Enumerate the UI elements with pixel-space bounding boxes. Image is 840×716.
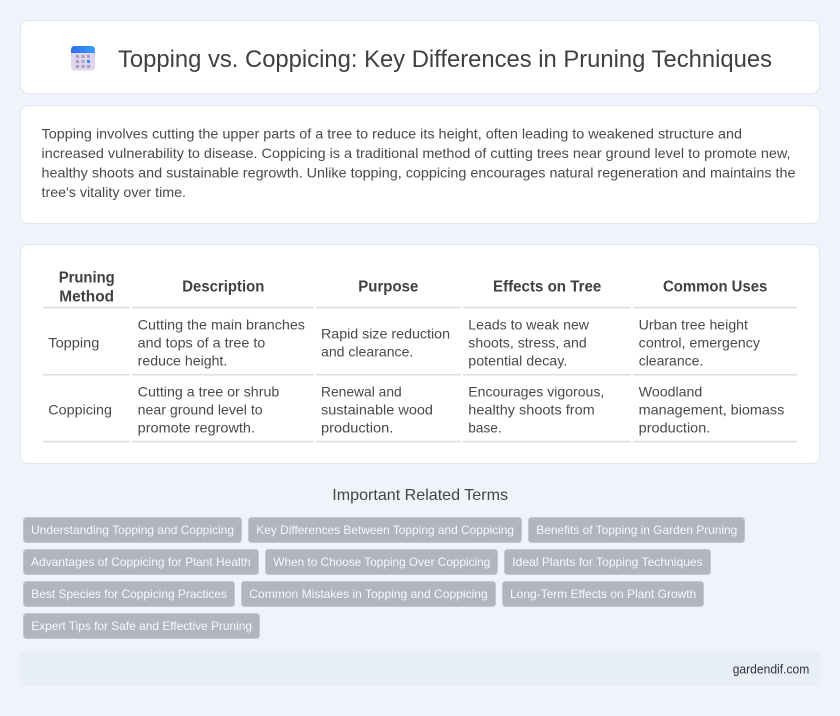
table row: Coppicing: production.: [321, 419, 393, 435]
text block: introduction: healthy shoots and sustainable regrowth. Unlike topping, coppicing encourages natural regeneration and maintains the: [42, 164, 796, 180]
table header row: Effects on Tree: [493, 279, 601, 296]
heading: related terms: Important Related Terms: [332, 487, 508, 504]
tag: [242, 582, 496, 606]
table row: Coppicing: Woodland: [639, 383, 702, 399]
tag: [504, 550, 710, 574]
table row: Topping: shoots, stress, and: [468, 334, 587, 350]
table row: Topping: Leads to weak new: [468, 316, 590, 332]
table row: Coppicing: Encourages vigorous,: [468, 383, 604, 399]
table header row: Pruning: [59, 270, 115, 287]
tag: Understanding Topping and Coppicing: [31, 523, 234, 537]
table row: Topping: Urban tree height: [639, 316, 748, 332]
panel: introduction: [20, 106, 820, 224]
tag: Best Species for Coppicing Practices: [31, 587, 227, 601]
panel: related term tags: [24, 518, 744, 638]
table row: Coppicing: base.: [468, 419, 502, 435]
table row: Coppicing: management, biomass: [639, 401, 784, 417]
table row: Topping: reduce height.: [138, 352, 227, 368]
panel: comparison table: [20, 244, 820, 464]
table header row: Common Uses: [663, 279, 767, 296]
table row: Topping: Topping: [48, 334, 99, 350]
tag: Ideal Plants for Topping Techniques: [512, 555, 703, 569]
text block: introduction: increased vulnerability to disease. Coppicing is a traditional method of cutting trees near ground level to promote new,: [42, 145, 791, 161]
tag: Expert Tips for Safe and Effective Pruning: [31, 619, 252, 633]
footer bar: [20, 652, 820, 686]
table header row: Purpose: [358, 279, 418, 296]
table row: Topping: potential decay.: [468, 352, 567, 368]
table row: Topping: Rapid size reduction: [321, 325, 450, 341]
table header row: Description: [182, 279, 264, 296]
tag: [24, 518, 242, 542]
table row: Coppicing: healthy shoots from: [468, 401, 595, 417]
table row: Topping: clearance.: [639, 352, 703, 368]
tag: [528, 518, 744, 542]
header panel: [20, 20, 820, 94]
table header row: Method: [59, 288, 114, 305]
table row: Topping: Cutting the main branches: [138, 316, 305, 332]
tag: Common Mistakes in Topping and Coppicing: [249, 587, 488, 601]
table row: Topping: and clearance.: [321, 343, 413, 359]
tag: Advantages of Coppicing for Plant Health: [31, 555, 251, 569]
icon: calendar: [71, 46, 95, 70]
table header row: [59, 270, 767, 305]
tag: [24, 582, 234, 606]
tag: Long-Term Effects on Plant Growth: [510, 587, 696, 601]
table row: Topping: and tops of a tree to: [138, 334, 266, 350]
table row: Coppicing: Cutting a tree or shrub: [138, 383, 280, 399]
text block: introduction: tree's vitality over time.: [42, 184, 186, 200]
table row: Topping: control, emergency: [639, 334, 760, 350]
text block: introduction: Topping involves cutting the upper parts of a tree to reduce its height, often leading to weakened structure and: [42, 126, 742, 142]
tag: [24, 550, 258, 574]
title: Topping vs. Coppicing: Key Differences in Pruning Techniques: [118, 46, 772, 73]
tag: When to Choose Topping Over Coppicing: [273, 555, 490, 569]
tag: [502, 582, 704, 606]
table row: Coppicing: [48, 383, 784, 435]
table row: Topping: [48, 316, 760, 368]
tag: Key Differences Between Topping and Coppicing: [256, 523, 514, 537]
table row: Coppicing: promote regrowth.: [138, 419, 255, 435]
tag: [248, 518, 522, 542]
table row: Coppicing: production.: [639, 419, 710, 435]
tag: [24, 614, 260, 638]
table row: Coppicing: sustainable wood: [321, 401, 433, 417]
footer source text: gardendif.com: [733, 661, 809, 676]
table row: Coppicing: near ground level to: [138, 401, 263, 417]
tag: Benefits of Topping in Garden Pruning: [536, 523, 737, 537]
tag: [266, 550, 498, 574]
table row: Coppicing: Renewal and: [321, 383, 402, 399]
text block: introduction: [42, 126, 796, 200]
table row: Coppicing: Coppicing: [48, 401, 112, 417]
